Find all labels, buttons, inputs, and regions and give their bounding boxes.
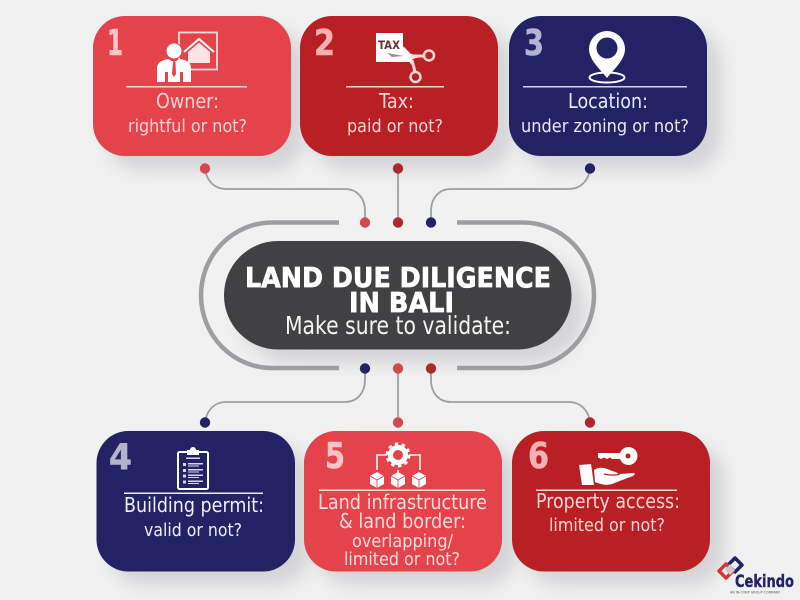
outer bracket: left <box>201 222 339 368</box>
icon: logo mark <box>719 558 742 578</box>
panel: card 5 land infrastructure: limited or not? <box>344 550 460 570</box>
panel: card 4 building permit: Building permit: <box>124 493 264 517</box>
logo: Cekindo: AN IN-CORP GROUP COMPANY <box>730 590 781 594</box>
title <box>245 262 551 319</box>
connector 4 <box>200 363 370 428</box>
panel: card 2 tax: Tax: <box>378 89 414 113</box>
connector 5 <box>393 363 403 428</box>
panel: card 3 location <box>509 16 707 156</box>
panel: card 1 owner <box>93 16 291 156</box>
panel: card 2 tax: paid or not? <box>347 117 443 137</box>
panel: card 4 building permit <box>96 431 295 572</box>
panel: card 3 location: 3 <box>524 23 544 64</box>
icon: owner and house <box>157 32 217 82</box>
panel: card 6 property access: 6 <box>528 436 549 477</box>
panel: card 4 building permit: 4 <box>109 437 132 478</box>
icon: map pin <box>589 31 625 82</box>
panel: card 5 land infrastructure: & land border: <box>339 509 466 533</box>
subtitle: Make sure to validate: <box>285 311 511 340</box>
icon: tax scissors: TAX <box>378 38 400 52</box>
panel: card 1 owner: Owner: <box>156 89 219 113</box>
center title pill <box>224 241 572 350</box>
panel: card 5 land infrastructure: Land infrastructure <box>318 490 487 514</box>
logo: Cekindo <box>719 558 794 594</box>
connector 6 <box>426 363 595 428</box>
panel: card 1 owner: rightful or not? <box>128 117 247 137</box>
icon: key and hand <box>579 447 637 485</box>
connector 2 <box>393 163 403 228</box>
outer bracket: right <box>457 222 594 368</box>
panel: card 5 land infrastructure: overlapping/ <box>352 532 453 552</box>
icon: clipboard <box>178 447 208 489</box>
connector 3 <box>426 163 595 228</box>
icon: tax scissors <box>376 33 434 82</box>
panel: card 1 owner: 1 <box>107 23 123 64</box>
title: IN BALI <box>349 287 454 319</box>
panel: card 3 location: Location: <box>568 89 648 113</box>
panel: card 2 tax <box>300 16 498 156</box>
panel: card 4 building permit: valid or not? <box>144 521 242 541</box>
panel: card 2 tax: 2 <box>314 23 335 64</box>
card shadows <box>107 30 724 585</box>
panel: card 6 property access <box>512 431 710 572</box>
title: LAND DUE DILIGENCE <box>245 262 551 294</box>
panel: card 5 land infrastructure <box>304 431 502 572</box>
panel: card 6 property access: Property access: <box>536 489 680 513</box>
panel: card 3 location: under zoning or not? <box>521 117 689 137</box>
panel: card 5 land infrastructure: 5 <box>325 436 345 477</box>
connector 1 <box>200 163 370 228</box>
icon: gear and cubes <box>370 444 426 488</box>
panel: card 6 property access: limited or not? <box>549 516 665 536</box>
